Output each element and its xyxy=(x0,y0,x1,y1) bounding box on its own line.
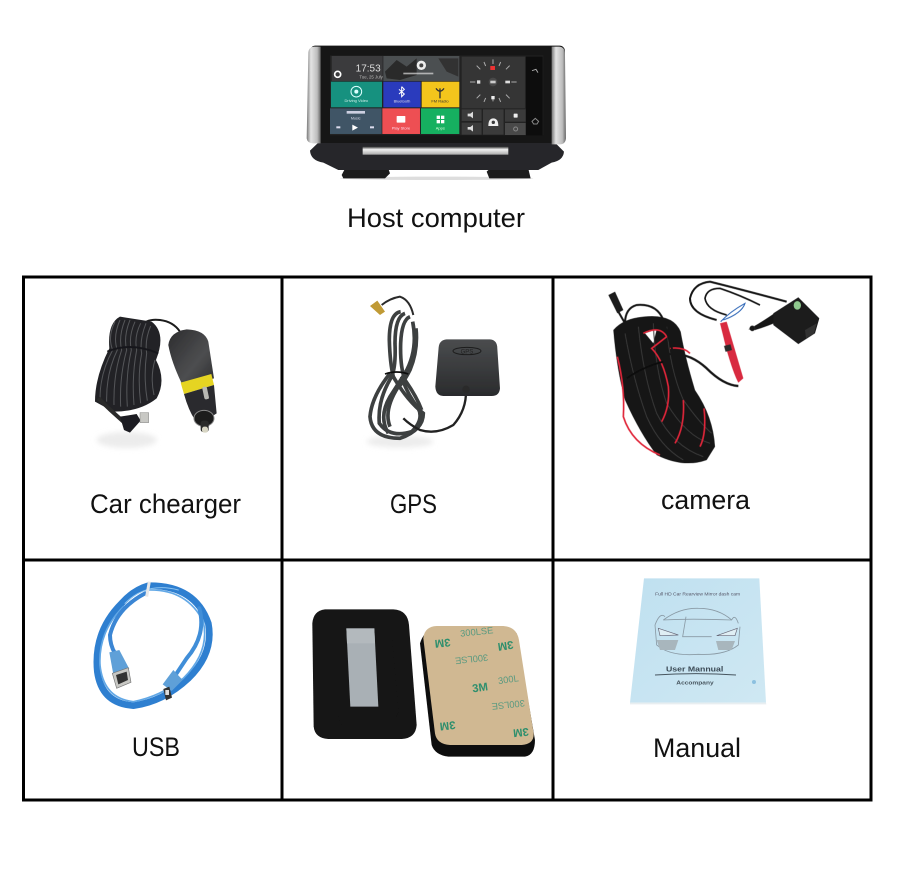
panel: camera xyxy=(553,277,871,560)
panel: GPS xyxy=(282,277,553,560)
icon: car charger and coiled cable xyxy=(95,317,217,448)
icon: user manual booklet: User Mannual xyxy=(666,667,723,674)
icon: GPS antenna xyxy=(367,297,500,448)
icon: dash camera device: 17:53 xyxy=(356,63,381,74)
icon: 3M adhesive pad: 300L xyxy=(497,673,519,686)
icon: 3M adhesive pad: 3M xyxy=(497,638,514,652)
label: Manual: Manual xyxy=(653,733,741,763)
heading: Host computer: Host computer xyxy=(347,203,525,233)
icon: 3M adhesive pad: 300LSE xyxy=(491,698,525,711)
panel: car charger xyxy=(24,277,282,560)
label: GPS: GPS xyxy=(390,489,437,519)
icon: 3M adhesive pad: 3M xyxy=(439,718,456,732)
icon: 3M adhesive pad: 300LSE xyxy=(455,652,489,666)
icon: dash camera device: Play Store xyxy=(392,125,411,130)
icon: dash camera device: Apps xyxy=(436,126,445,131)
panel: host computer xyxy=(307,46,566,233)
icon: dash camera device: Tue, 25 July xyxy=(359,74,384,79)
icon: 3M adhesive pad: 3M xyxy=(471,681,489,695)
panel: magnetic mount pads xyxy=(282,560,553,800)
icon: 3M adhesive pad: 3M xyxy=(434,636,451,649)
icon: rear camera with cable xyxy=(608,282,819,463)
label: Car chearger: Car chearger xyxy=(90,489,241,519)
label: camera: camera xyxy=(661,485,751,515)
icon: blue USB cable xyxy=(97,582,209,706)
panel: USB xyxy=(24,560,282,800)
icon: dash camera device: Bluetooth xyxy=(394,98,410,103)
icon: user manual booklet xyxy=(630,578,766,704)
icon: 3M adhesive pad: 3M xyxy=(512,725,529,738)
icon: dash camera device: Driving Video xyxy=(345,98,369,103)
icon: magnetic mount plate xyxy=(312,609,417,739)
icon: dash camera device: FM Radio xyxy=(431,99,449,104)
icon: GPS antenna: GPS xyxy=(461,349,473,355)
icon: dash camera device xyxy=(307,46,566,180)
label: USB: USB xyxy=(132,732,180,762)
icon: dash camera device: Music xyxy=(351,117,361,121)
icon: user manual booklet: Accompany xyxy=(676,680,715,686)
icon: 3M adhesive pad xyxy=(420,625,535,757)
panel: manual xyxy=(553,560,871,800)
icon: user manual booklet: Full HD Car Rearview Mirror dash cam xyxy=(655,592,741,597)
icon: 3M adhesive pad: 300LSE xyxy=(460,625,494,639)
